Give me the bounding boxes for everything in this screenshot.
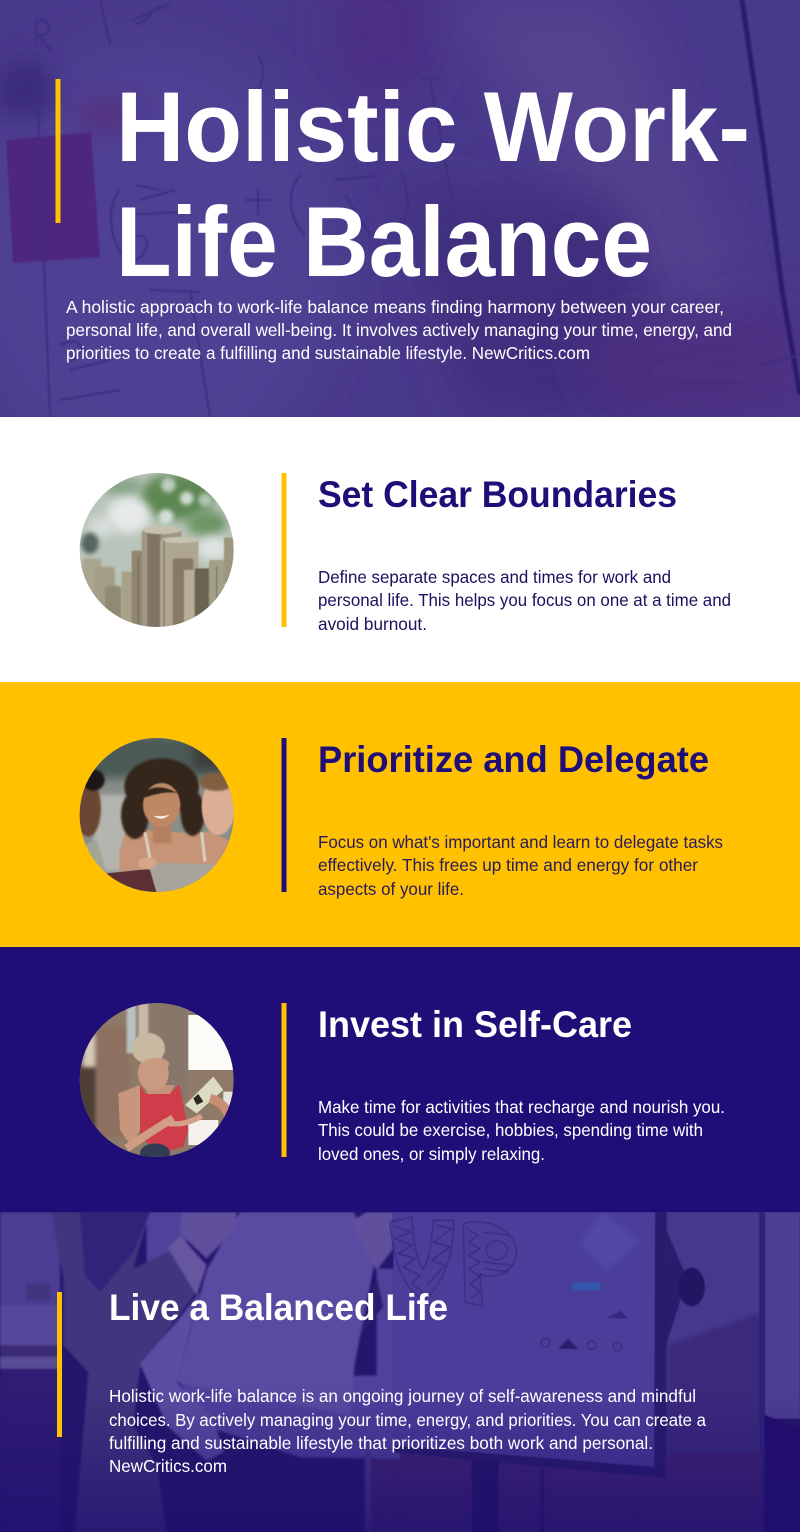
body text: Make time for activities that recharge and nourish you.: [318, 1097, 725, 1117]
accent bar: [56, 79, 60, 223]
panel: invest in self-care: [0, 947, 800, 1212]
accent bar: [282, 1003, 286, 1157]
photo: wooden fence: [77, 470, 237, 631]
panel: set clear boundaries: [80, 473, 730, 630]
body text: [318, 1097, 725, 1164]
hands: [180, 1212, 237, 1259]
body text: aspects of your life.: [318, 879, 464, 899]
body text: [109, 1386, 706, 1476]
heading: Live a Balanced Life: [109, 1287, 448, 1328]
photo: woman with lotion bottle: [77, 1000, 237, 1163]
heading: Invest in Self-Care: [318, 1004, 632, 1045]
heading: Set Clear Boundaries: [318, 474, 677, 515]
vest: [52, 1212, 197, 1532]
body text: effectively. This frees up time and energy for other: [318, 855, 698, 875]
stand legs: [472, 1460, 498, 1532]
body text: Define separate spaces and times for work and: [318, 567, 671, 587]
body text: choices. By actively managing your time, energy, and priorities. You can create a: [109, 1410, 706, 1430]
under paper area: [180, 1374, 378, 1459]
body text: loved ones, or simply relaxing.: [318, 1144, 545, 1164]
title: Life Balance: [116, 186, 652, 297]
panel: hero header: [0, 0, 800, 417]
intro paragraph: [66, 297, 732, 363]
body text: fulfilling and sustainable lifestyle that prioritizes both work and personal.: [109, 1433, 653, 1453]
closing background photo: [0, 1212, 800, 1532]
left half of the photo: [0, 1212, 403, 1532]
photo: three people at laptops: [76, 735, 237, 895]
shirt sleeve: [140, 1292, 223, 1460]
body text: [318, 567, 731, 634]
body text: This could be exercise, hobbies, spending time with: [318, 1120, 703, 1140]
body text: avoid burnout.: [318, 614, 427, 634]
paper: [177, 1212, 377, 1415]
body text: [318, 832, 723, 899]
heading: Prioritize and Delegate: [318, 739, 709, 780]
intro paragraph: priorities to create a fulfilling and sustainable lifestyle. NewCritics.com: [66, 343, 590, 363]
body text: Focus on what's important and learn to delegate tasks: [318, 832, 723, 852]
accent bar: [282, 738, 286, 892]
board frame: [393, 1212, 667, 1478]
body text: Holistic work-life balance is an ongoing journey of self-awareness and mindful: [109, 1386, 696, 1406]
title: Holistic Work-: [116, 71, 750, 182]
body text: personal life. This helps you focus on one at a time and: [318, 590, 731, 610]
accent bar: [282, 473, 286, 627]
body text: NewCritics.com: [109, 1456, 227, 1476]
intro paragraph: A holistic approach to work-life balance means finding harmony between your career,: [66, 297, 724, 317]
right half of the photo: [390, 1212, 800, 1532]
title: [116, 71, 750, 297]
hero background photo: [0, 0, 800, 417]
accent bar: [57, 1292, 62, 1437]
panel: prioritize and delegate: [0, 682, 800, 947]
UP scribble: [390, 1217, 622, 1351]
intro paragraph: personal life, and overall well-being. It involves actively managing your time, energy, and: [66, 320, 732, 340]
panel: live a balanced life: [0, 1212, 800, 1532]
